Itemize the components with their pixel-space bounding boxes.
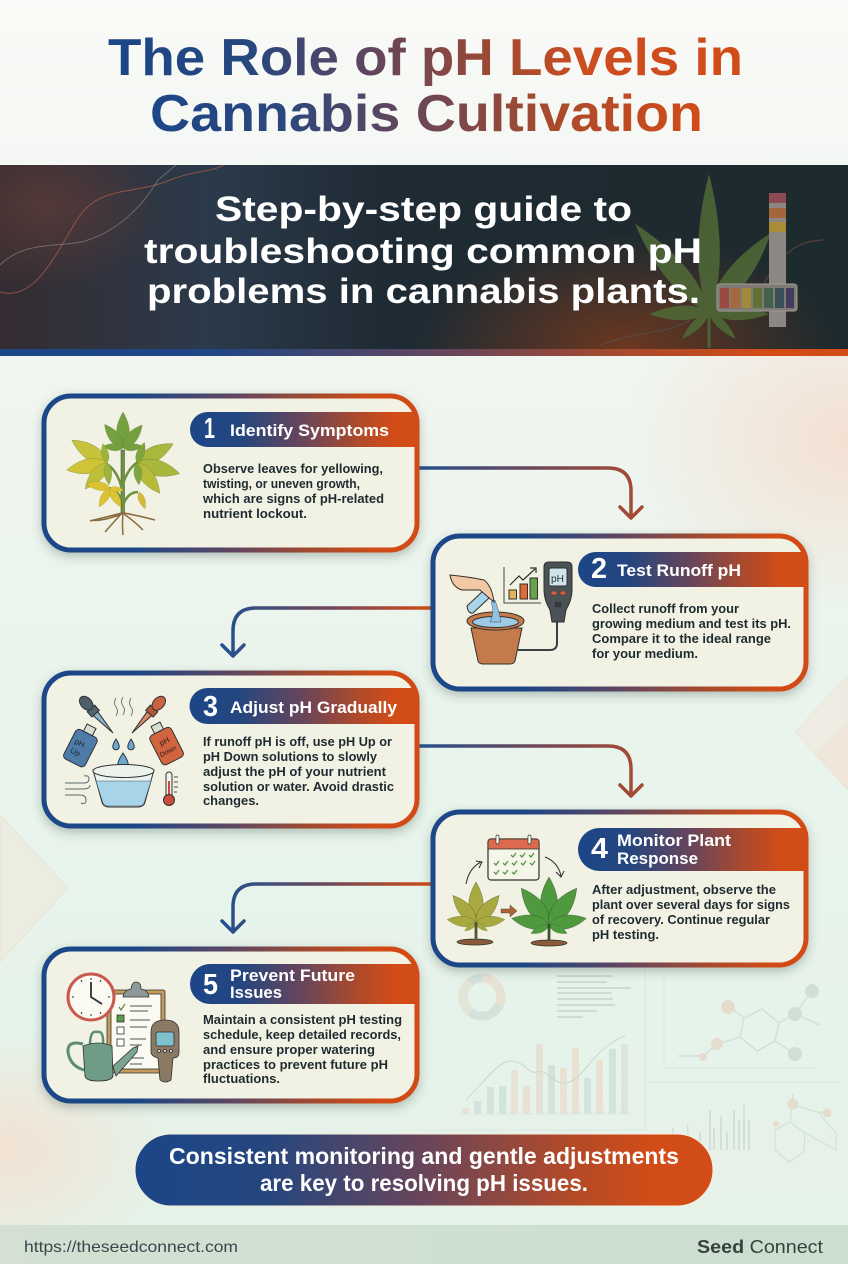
step 2 text: for your medium. (592, 646, 698, 661)
step 4 header: Response (617, 849, 698, 868)
title: The Role of pH Levels in (108, 29, 743, 87)
callout: key takeaway: are key to resolving pH issues. (260, 1170, 588, 1196)
icon: pH test strip (717, 193, 797, 327)
step 2 text: Compare it to the ideal range (592, 631, 771, 646)
step 1 text: Observe leaves for yellowing, (203, 461, 383, 476)
step 3 header: 3 (203, 691, 218, 723)
brand name: Seed Connect (697, 1237, 823, 1257)
step 3 text: solution or water. Avoid drastic (203, 779, 394, 794)
step 3 text: If runoff pH is off, use pH Up or (203, 734, 392, 749)
step 1 header: 1 (204, 413, 215, 445)
icon: calendar and plant recovery (447, 835, 588, 946)
icon: runoff test with pot and meter (450, 562, 572, 664)
arrow: step 2 to step 3 (222, 608, 431, 656)
subtitle text: Step-by-step guide to (215, 190, 632, 229)
icon: cannabis leaf (627, 174, 779, 348)
step 1 text (202, 461, 384, 521)
step 2 header: 2 (591, 553, 607, 585)
subtitle text: troubleshooting common pH (144, 232, 702, 271)
step 1 header (190, 412, 417, 447)
arrow: step 3 to step 4 (419, 746, 642, 796)
step 3 text: changes. (203, 793, 259, 808)
subtitle text: problems in cannabis plants. (147, 272, 700, 311)
step 5 header (190, 964, 417, 1004)
arrow: step 1 to step 2 (419, 468, 642, 518)
step 5 header: Prevent Future (230, 966, 355, 985)
step 3 header: Adjust pH Gradually (230, 698, 398, 717)
step 4 header: 4 (591, 833, 608, 865)
footer bar (0, 1225, 848, 1264)
step 4 header: Monitor Plant (617, 831, 731, 850)
icon: runoff test with pot and meter: pH (551, 573, 564, 585)
molecule one (678, 991, 820, 1056)
step 3 text: adjust the pH of your nutrient (203, 764, 387, 779)
callout: key takeaway: Consistent monitoring and gentle adjustments (169, 1143, 679, 1169)
panel: step 5 prevent future issues (44, 949, 417, 1101)
step 1 text: nutrient lockout. (203, 506, 307, 521)
step 5 text: fluctuations. (203, 1071, 280, 1086)
panel: step 3 adjust pH gradually (44, 673, 417, 826)
subtitle text (144, 190, 702, 311)
icon: clock, clipboard, watering can and meter (68, 974, 179, 1082)
subtitle banner (0, 165, 848, 356)
step 5 header: 5 (203, 969, 218, 1001)
step 5 text (203, 1012, 402, 1086)
step 1 text: twisting, or uneven growth, (203, 476, 360, 491)
donut (463, 978, 501, 1016)
step 4 text: of recovery. Continue regular (592, 912, 770, 927)
step 4 text: pH testing. (592, 927, 659, 942)
icon: pH up and down droppers over a water bowl: Up (69, 746, 82, 759)
panel: step 4 monitor plant response (433, 812, 806, 965)
arrow: step 4 to step 5 (222, 884, 431, 932)
panel: step 1 identify symptoms (44, 396, 417, 550)
step 5 text: Maintain a consistent pH testing (203, 1012, 402, 1027)
title (108, 29, 743, 143)
step 2 text: growing medium and test its pH. (592, 616, 791, 631)
step 4 text (592, 882, 790, 942)
icon: pH up and down droppers over a water bowl (62, 694, 185, 807)
step 2 header (578, 552, 806, 587)
step 5 header: Issues (230, 983, 282, 1002)
step 2 text (592, 601, 791, 661)
step 5 text: practices to prevent future pH (203, 1057, 388, 1072)
icon: pH up and down droppers over a water bowl: Down (159, 745, 178, 759)
step 3 text (203, 734, 394, 808)
step 4 header (578, 828, 806, 871)
step 1 header: Identify Symptoms (230, 421, 389, 440)
step 1 text: which are signs of pH-related (202, 491, 384, 506)
step 2 header: Test Runoff pH (617, 561, 741, 580)
faint data charts background (440, 970, 842, 1162)
step 5 text: and ensure proper watering (203, 1042, 375, 1057)
step 3 text: pH Down solutions to slowly (203, 749, 378, 764)
icon: pH up and down droppers over a water bowl: pH (73, 737, 86, 750)
panel: step 2 test runoff pH (433, 536, 806, 689)
step 4 text: After adjustment, observe the (592, 882, 776, 897)
step 2 text: Collect runoff from your (592, 601, 739, 616)
step 4 text: plant over several days for signs (592, 897, 790, 912)
title: Cannabis Cultivation (150, 85, 703, 143)
callout: key takeaway (135, 1134, 713, 1206)
icon: yellowing plant (65, 412, 182, 535)
step 3 header (190, 688, 417, 724)
website url: https://theseedconnect.com (24, 1239, 238, 1256)
step 5 text: schedule, keep detailed records, (203, 1027, 401, 1042)
icon: pH up and down droppers over a water bowl: pH (158, 735, 171, 748)
